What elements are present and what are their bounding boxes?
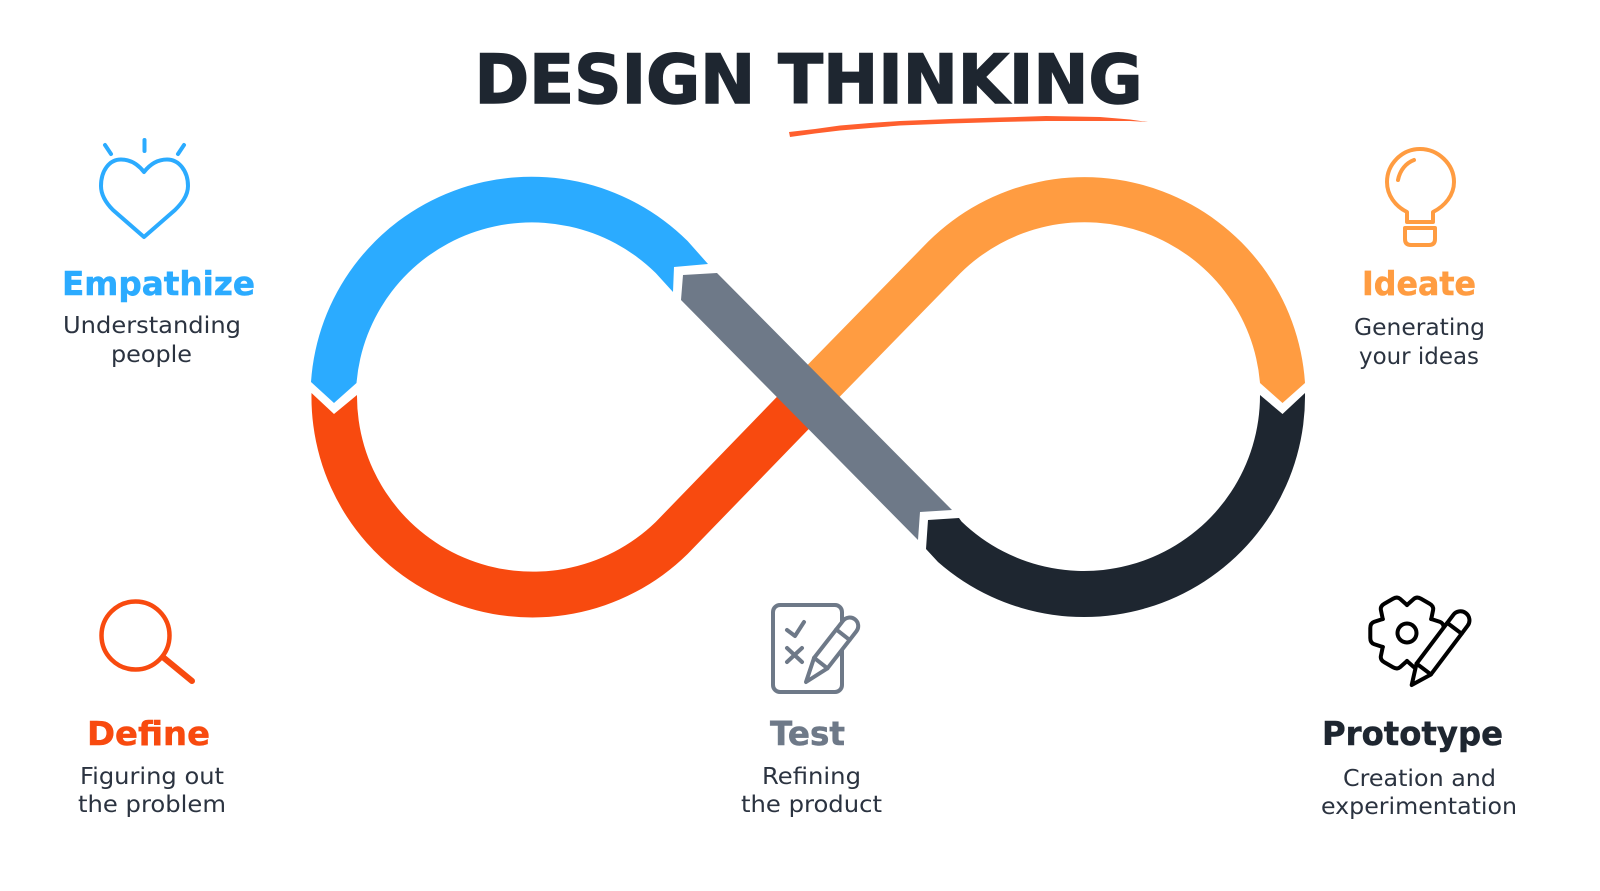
icon: heart (101, 140, 188, 237)
step: ideate: your ideas (1359, 344, 1479, 370)
infinity loop (311, 177, 1305, 617)
icon: checklist and pencil (773, 605, 862, 692)
step: ideate (1354, 149, 1485, 370)
segment: red define (311, 373, 832, 617)
description: Refining (762, 764, 861, 790)
step: define: the problem (78, 792, 226, 818)
heading: Test (770, 714, 845, 753)
segment: grey test (681, 273, 952, 540)
title: DESIGN THINKING (474, 41, 1142, 120)
step: test: the product (741, 792, 882, 818)
heading: Empathize (62, 264, 255, 303)
step: define (78, 602, 226, 818)
description: Generating (1354, 315, 1485, 341)
segment: orange ideate (784, 177, 1305, 421)
icon: magnifying glass (102, 602, 192, 681)
title underline brush stroke (789, 116, 1148, 137)
description: Figuring out (80, 764, 224, 790)
step: test (741, 605, 882, 818)
step: empathize (62, 140, 255, 368)
heading: Prototype (1322, 714, 1503, 753)
icon: gear and pencil (1370, 594, 1473, 690)
icon: light bulb (1387, 149, 1454, 245)
step: empathize: people (111, 342, 192, 368)
segment: blue empathize (311, 177, 708, 403)
description: Creation and (1343, 766, 1496, 792)
step: prototype: experimentation (1321, 794, 1517, 820)
heading: Define (87, 714, 210, 753)
heading: Ideate (1362, 264, 1476, 303)
step: prototype (1321, 594, 1517, 820)
segment: dark prototype (926, 393, 1305, 617)
description: Understanding (63, 313, 241, 339)
